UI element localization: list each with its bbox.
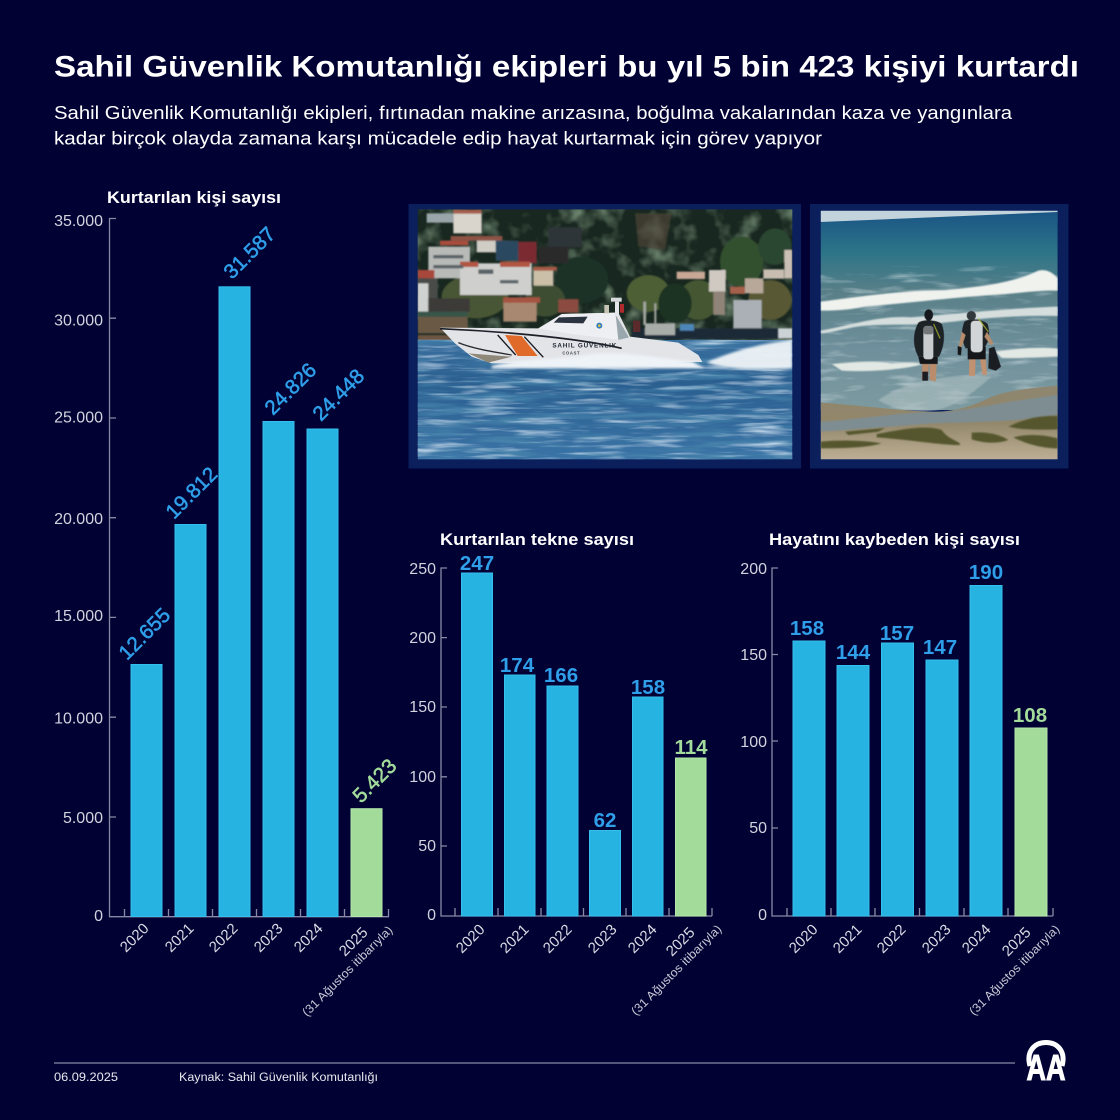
date: 06.09.2025 bbox=[54, 1072, 118, 1084]
boat: COAST bbox=[562, 350, 580, 355]
year labels: (31 Ağustos itibarıyla) bbox=[628, 922, 724, 1018]
y axis: 150 bbox=[409, 699, 436, 716]
houses bbox=[453, 212, 482, 233]
year labels: (31 Ağustos itibarıyla) bbox=[299, 923, 395, 1019]
logo: AA bbox=[1026, 1042, 1066, 1088]
value labels: 158 bbox=[631, 676, 665, 699]
bars bbox=[131, 287, 382, 916]
value labels: 147 bbox=[923, 636, 957, 659]
y axis: 100 bbox=[409, 769, 436, 786]
value labels: 157 bbox=[880, 622, 914, 645]
value labels: 114 bbox=[674, 736, 708, 759]
panel: chart of rescued people bbox=[54, 189, 401, 1019]
year labels: 2021 bbox=[162, 920, 197, 956]
y axis: 100 bbox=[740, 734, 767, 751]
panel: chart of deaths bbox=[740, 531, 1062, 1018]
seaweed bbox=[821, 416, 1058, 448]
y axis: 5.000 bbox=[63, 810, 103, 827]
source: Kaynak: Sahil Güvenlik Komutanlığı bbox=[179, 1072, 378, 1084]
year labels: 2023 bbox=[251, 920, 286, 956]
title: Sahil Güvenlik Komutanlığı ekipleri bu yıl 5 bin 423 kişiyi kurtardı bbox=[54, 50, 1079, 84]
logo: AA: AA bbox=[1026, 1047, 1066, 1088]
year labels: 2025 bbox=[336, 924, 371, 960]
wake spray bbox=[492, 340, 792, 369]
diver left bbox=[914, 309, 944, 382]
value labels: 12.655 bbox=[114, 604, 175, 665]
year labels: 2020 bbox=[117, 920, 152, 956]
y axis: 50 bbox=[418, 838, 436, 855]
year labels: 2025 bbox=[999, 924, 1034, 960]
value labels: 174 bbox=[500, 654, 535, 677]
panel: divers photo bbox=[810, 204, 1068, 468]
panel: boat photo bbox=[408, 204, 801, 468]
heading: rescued boats: Kurtarılan tekne sayısı bbox=[440, 531, 634, 549]
value labels: 247 bbox=[460, 552, 494, 575]
year labels: 2020 bbox=[453, 921, 488, 957]
value labels: 5.423 bbox=[348, 755, 401, 808]
y axis: 0 bbox=[758, 907, 767, 924]
value labels: 158 bbox=[790, 617, 824, 640]
y axis: 150 bbox=[740, 647, 767, 664]
year labels: 2021 bbox=[830, 921, 865, 957]
year labels: 2023 bbox=[585, 921, 620, 957]
year labels: 2020 bbox=[786, 921, 821, 957]
value labels: 31.587 bbox=[219, 223, 280, 284]
value labels: 108 bbox=[1013, 704, 1047, 727]
value labels bbox=[114, 223, 401, 808]
year labels: (31 Ağustos itibarıyla) bbox=[966, 922, 1062, 1018]
y axis: 30.000 bbox=[54, 312, 103, 330]
value labels bbox=[460, 552, 708, 832]
y axis: 200 bbox=[409, 630, 436, 647]
beach bbox=[821, 386, 1058, 459]
boat: SAHIL GÜVENLIK bbox=[552, 340, 617, 349]
year labels: 2022 bbox=[874, 921, 909, 957]
value labels: 24.448 bbox=[308, 365, 369, 426]
year labels bbox=[117, 920, 395, 1019]
year labels: 2021 bbox=[497, 921, 532, 957]
year labels: 2022 bbox=[540, 921, 575, 957]
heading: deaths: Hayatını kaybeden kişi sayısı bbox=[769, 531, 1020, 549]
bars bbox=[793, 586, 1047, 916]
y axis: 35.000 bbox=[54, 213, 103, 230]
y axis: 15.000 bbox=[54, 608, 103, 625]
value labels: 190 bbox=[969, 561, 1003, 584]
heading: rescued people: Kurtarılan kişi sayısı bbox=[107, 189, 281, 207]
y axis: 0 bbox=[427, 907, 436, 924]
y axis: 25.000 bbox=[54, 410, 103, 426]
illustration: coast guard boat bbox=[418, 209, 792, 459]
value labels bbox=[790, 561, 1047, 727]
y axis bbox=[409, 561, 712, 924]
y axis: 200 bbox=[740, 561, 767, 578]
y axis bbox=[54, 213, 389, 925]
sea bbox=[418, 340, 792, 459]
footer bbox=[54, 1063, 1015, 1084]
value labels: 24.826 bbox=[260, 359, 321, 420]
subtitle: kadar birçok olayda zamana karşı mücadele edip hayat kurtarmak için görev yapıyor bbox=[54, 128, 822, 148]
subtitle bbox=[54, 102, 1013, 148]
illustration: divers walking into the sea bbox=[821, 211, 1058, 459]
y axis bbox=[740, 561, 1053, 924]
year labels bbox=[786, 921, 1062, 1018]
y axis: 10.000 bbox=[54, 710, 103, 728]
value labels: 144 bbox=[836, 641, 871, 664]
value labels: 166 bbox=[544, 664, 578, 687]
value labels: 19.812 bbox=[161, 463, 222, 524]
y axis: 0 bbox=[94, 908, 103, 925]
y axis: 50 bbox=[749, 820, 767, 837]
photo frame bbox=[408, 204, 801, 468]
year labels: 2024 bbox=[291, 920, 326, 956]
year labels: 2022 bbox=[206, 920, 241, 956]
boat bbox=[440, 298, 702, 363]
value labels: 62 bbox=[594, 809, 616, 832]
year labels: 2024 bbox=[625, 921, 660, 957]
year labels bbox=[453, 921, 724, 1018]
y axis: 250 bbox=[409, 561, 436, 578]
year labels: 2024 bbox=[959, 921, 994, 957]
photo frame bbox=[810, 204, 1068, 468]
year labels: 2025 bbox=[663, 924, 698, 960]
panel: chart of rescued boats bbox=[409, 531, 724, 1018]
y axis: 20.000 bbox=[54, 511, 103, 528]
diver right bbox=[958, 311, 1001, 376]
year labels: 2023 bbox=[919, 921, 954, 957]
subtitle: Sahil Güvenlik Komutanlığı ekipleri, fırtınadan makine arızasına, boğulma vakalarından kaza ve yangınlara bbox=[54, 102, 1013, 123]
bars bbox=[462, 573, 706, 916]
